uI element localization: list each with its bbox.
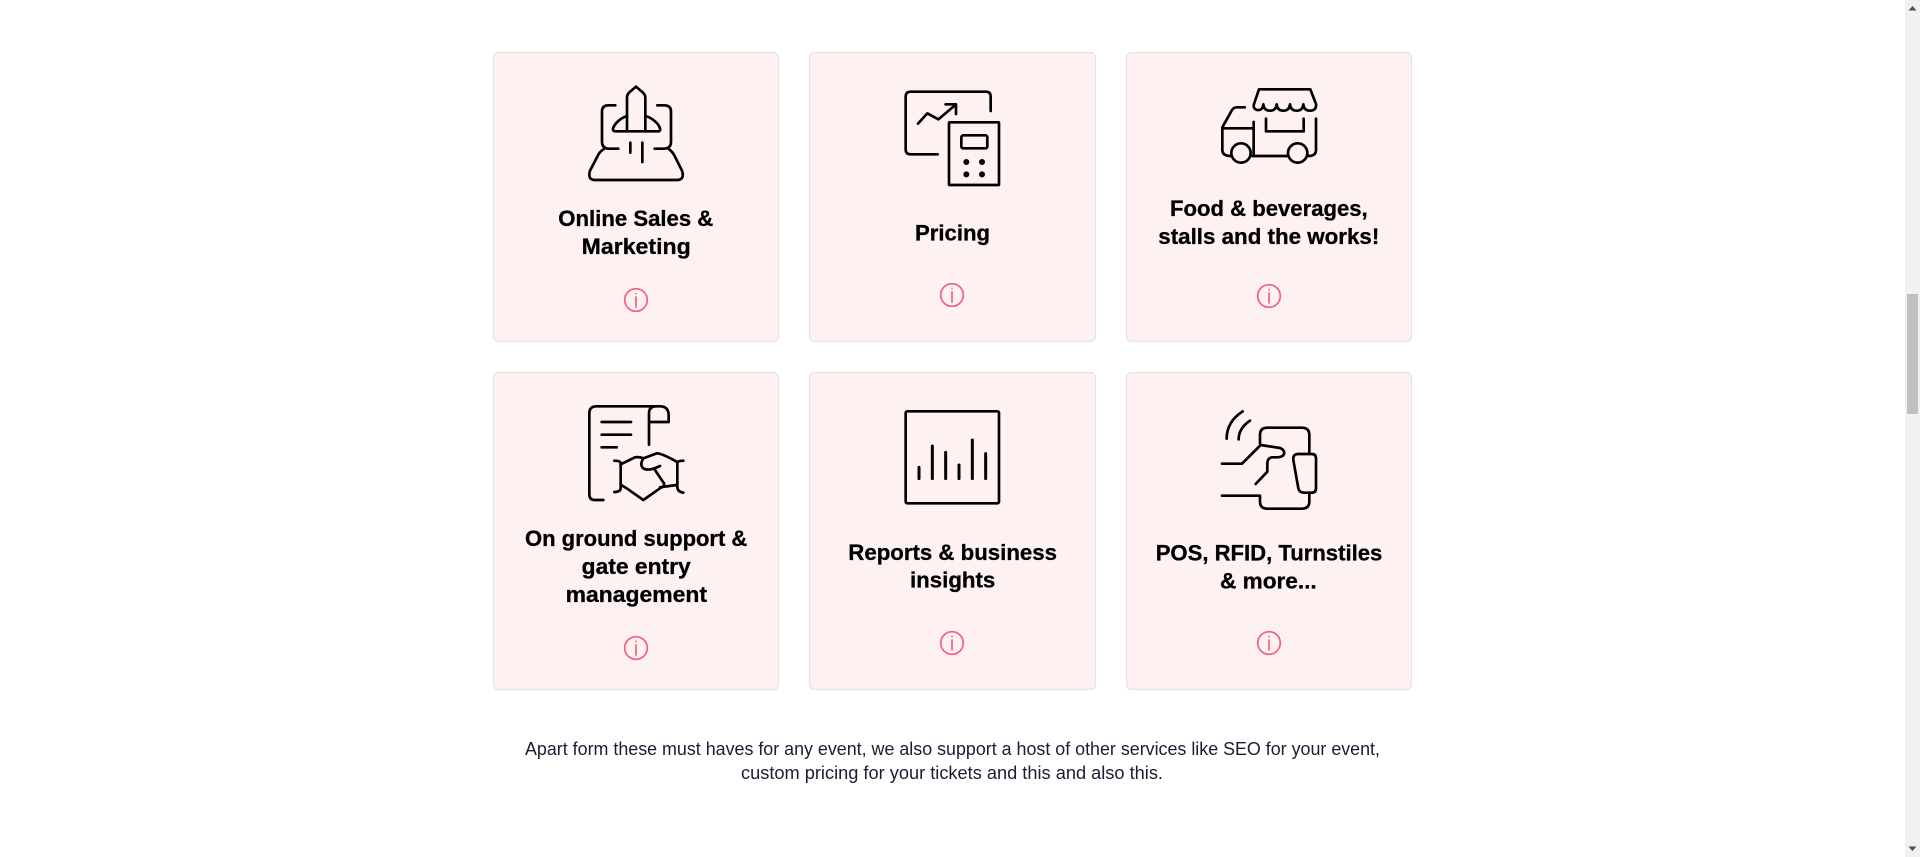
heading: on ground support — [525, 526, 747, 607]
heading: on ground support: gate entry — [582, 554, 691, 579]
panel: POS and RFID — [1126, 372, 1412, 690]
heading: on ground support: On ground support & — [525, 526, 747, 551]
heading: POS and RFID: POS, RFID, Turnstiles — [1156, 540, 1382, 566]
heading: food and beverages: Food & beverages, — [1170, 196, 1368, 221]
panel: pricing — [810, 52, 1096, 342]
panel: on ground support — [494, 372, 778, 690]
heading: POS and RFID: & more... — [1220, 568, 1317, 594]
icon: info — [941, 632, 963, 654]
icon: contract and handshake — [589, 406, 683, 500]
heading: online sales and marketing — [558, 206, 713, 259]
heading: food and beverages: stalls and the works! — [1158, 224, 1379, 249]
heading: online sales and marketing: Online Sales & — [558, 206, 713, 231]
panel: online sales and marketing — [494, 52, 778, 342]
heading: pricing: Pricing — [915, 220, 990, 246]
icon: rocket launching from laptop — [589, 87, 683, 180]
icon: bar chart — [906, 411, 999, 503]
icon: food truck — [1222, 89, 1316, 163]
heading: online sales and marketing: Marketing — [582, 234, 691, 259]
heading: reports and insights: insights — [910, 568, 995, 592]
icon: info — [625, 289, 647, 311]
scrollbar — [1905, 0, 1920, 857]
text block: closing paragraph — [525, 739, 1380, 783]
icon: chart and calculator — [906, 92, 999, 185]
icon: info — [941, 284, 963, 306]
heading: POS and RFID — [1156, 540, 1382, 594]
heading: reports and insights: Reports & business — [848, 540, 1057, 565]
heading: food and beverages — [1158, 196, 1379, 249]
panel: reports and insights — [810, 372, 1096, 690]
icon: info — [625, 637, 647, 659]
panel: food and beverages — [1126, 52, 1412, 342]
heading: reports and insights — [848, 540, 1057, 592]
text block: closing paragraph: custom pricing for your tickets and this and also this. — [741, 763, 1163, 783]
text block: closing paragraph: Apart form these must haves for any event, we also support a host of other services like SEO for your event, — [525, 739, 1380, 759]
icon: info — [1258, 632, 1280, 654]
icon: hand tapping device — [1222, 411, 1316, 509]
heading: on ground support: management — [566, 582, 708, 607]
icon: info — [1258, 285, 1280, 307]
